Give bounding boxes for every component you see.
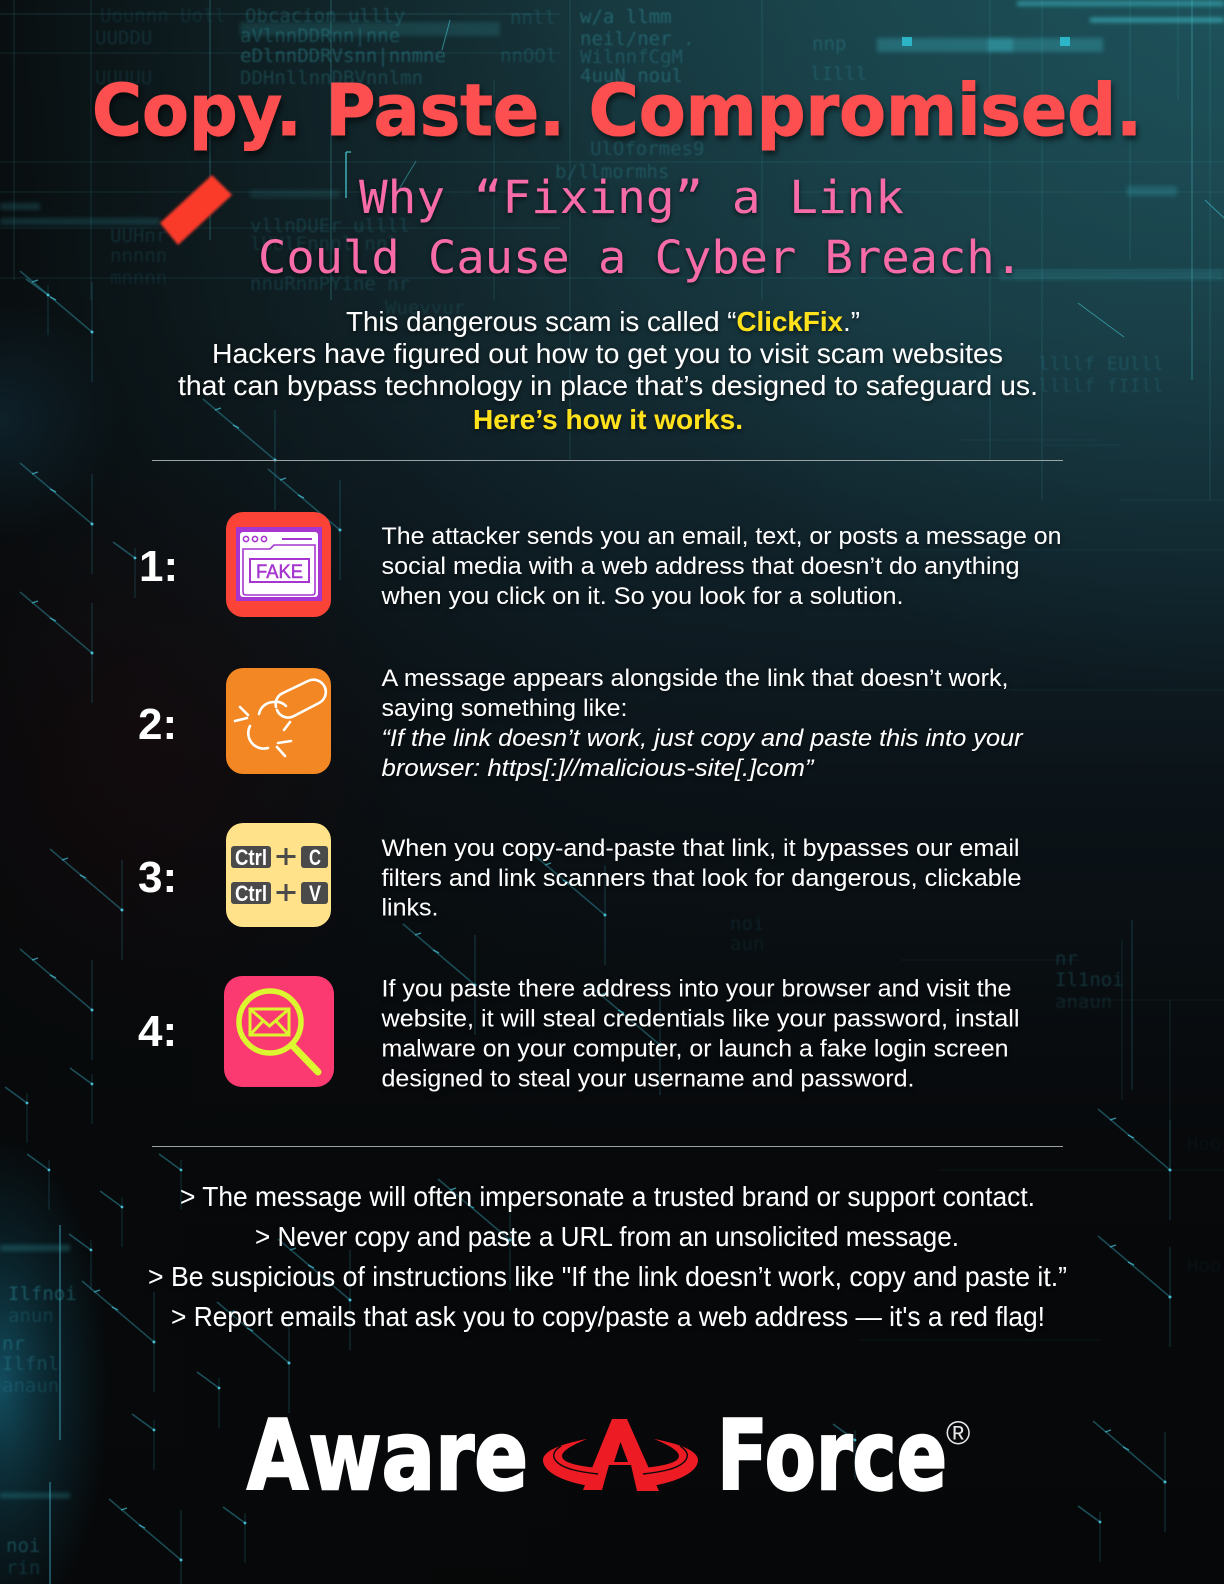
icon: keyboard shortcuts (226, 823, 331, 927)
faint code: aVlnnDDRnn|nne (240, 25, 400, 47)
faint code: vllnDUEr ullll (250, 215, 410, 237)
step 4 text (380, 976, 1020, 1092)
icon: keyboard shortcuts: Ctrl (235, 881, 267, 906)
diagonal dashes (5, 271, 1172, 1584)
logo mark (543, 1419, 698, 1491)
faint code: Obcacion ullly (245, 5, 405, 27)
step 4 text: website, it will steal credentials like your password, install (380, 1006, 1020, 1032)
step 2 number: 2: (138, 700, 177, 749)
step 3 text: links. (382, 894, 438, 922)
faint code: lUUlEnnnl nnl (250, 233, 399, 255)
faint code: nnnnn (110, 245, 167, 267)
faint code: llllf fIIll (1038, 375, 1164, 397)
icon: magnifier over envelope (224, 976, 334, 1087)
step 4 text: designed to steal your username and password. (382, 1066, 914, 1092)
intro text (178, 306, 1038, 435)
faint code: WilnnfCgM (580, 46, 683, 68)
step 4 number: 4: (138, 1007, 177, 1056)
faint code: b/llmormhs (555, 161, 669, 183)
faint code: nnll (510, 7, 556, 29)
step 3 (138, 823, 1022, 927)
intro text: that can bypass technology in place that’s designed to safeguard us. (178, 370, 1038, 401)
icon: keyboard shortcuts: C (309, 845, 321, 870)
step 2 text: browser: https[:]//malicious-site[.]com” (382, 755, 815, 782)
subtitle: Why “Fixing” a Link (359, 171, 904, 224)
intro text: Here’s how it works. (473, 404, 743, 435)
faint code: nnuRnnPYine nr (250, 273, 410, 295)
step 4 (138, 976, 1020, 1092)
faint code: neil/ner . (580, 28, 694, 50)
faint code: Hoo (1187, 1255, 1221, 1277)
icon: broken chain link (226, 668, 331, 774)
faint code: 4uuN noul (580, 65, 683, 87)
faint code: UUUUU (95, 67, 152, 89)
icon: fake browser window: FAKE (256, 562, 303, 583)
step 2 text: A message appears alongside the link that doesn’t work, (382, 665, 1009, 692)
step 3 text (382, 835, 1022, 922)
faint code: noi (6, 1535, 40, 1557)
step 3 text: When you copy-and-paste that link, it bypasses our email (382, 835, 1020, 862)
faint code: Ilfnl (2, 1353, 59, 1375)
title: Copy. Paste. Compromised. (92, 69, 1142, 152)
step 2 text: saying something like: (382, 695, 628, 722)
faint code: Hoo (1187, 1133, 1221, 1155)
faint code: llllf EUlll (1038, 353, 1164, 375)
faint code: nnp (812, 33, 846, 55)
icon: keyboard shortcuts: Ctrl (235, 845, 267, 870)
step 4 text: malware on your computer, or launch a fake login screen (382, 1036, 1008, 1062)
faint code: anun (8, 1305, 54, 1327)
tips list: > Be suspicious of instructions like "If the link doesn’t work, copy and paste it.” (148, 1261, 1067, 1292)
step 1 text: when you click on it. So you look for a solution. (380, 583, 903, 610)
subtitle: Could Cause a Cyber Breach. (258, 231, 1023, 284)
step 1 text (380, 523, 1061, 610)
icon: keyboard shortcuts: V (309, 881, 321, 906)
faint code: eDlnnDDRVsnn|nnmne (240, 45, 446, 67)
logo: AwareForce: Force (717, 1400, 947, 1512)
faint code: anaun (2, 1375, 59, 1397)
faint code: mnnnn (110, 267, 167, 289)
subtitle (258, 171, 1023, 284)
faint code: nr (1055, 948, 1078, 970)
intro text: Hackers have figured out how to get you to visit scam websites (212, 338, 1003, 369)
intro text: This dangerous scam is called “ClickFix.” (346, 306, 860, 337)
faint code: lIlll (810, 63, 867, 85)
faint code: anaun (1055, 991, 1112, 1013)
logo: AwareForce: ® (946, 1414, 970, 1451)
decorative red tilted bar (160, 175, 232, 245)
faint code: Il1noi (1055, 969, 1124, 991)
logo: AwareForce (247, 1400, 970, 1512)
faint code: Ilfnoi (8, 1283, 77, 1305)
faint code: rin (6, 1557, 40, 1579)
faint code: DDHnllnnDBVnnlmn (240, 67, 423, 89)
tips list: > Never copy and paste a URL from an unsolicited message. (255, 1221, 959, 1252)
faint code: nnOOl (500, 45, 557, 67)
faint code: nr (2, 1333, 25, 1355)
faint code: Uounnn Uoll (100, 5, 226, 27)
step 1 number: 1: (139, 542, 178, 591)
step 1 (139, 512, 1062, 617)
step 2 text: “If the link doesn’t work, just copy and paste this into your (382, 725, 1023, 752)
tips list (148, 1181, 1067, 1332)
step 4 text: If you paste there address into your browser and visit the (382, 976, 1012, 1002)
step 3 text: filters and link scanners that look for dangerous, clickable (382, 865, 1022, 892)
faint code: w/a llmm (580, 6, 672, 28)
tips list: > The message will often impersonate a trusted brand or support contact. (180, 1181, 1035, 1212)
step 2 text (382, 665, 1023, 782)
faint code: Wuevvur (385, 297, 465, 319)
faint code: UUDDU (95, 27, 152, 49)
faint code: UUHnr (110, 225, 167, 247)
tips list: > Report emails that ask you to copy/paste a web address — it's a red flag! (171, 1301, 1045, 1332)
logo: AwareForce: Aware (247, 1400, 528, 1512)
step 3 number: 3: (138, 853, 177, 902)
step 2 (138, 665, 1023, 782)
faint code: UlOformes9 (590, 138, 704, 160)
faint code: noi (730, 913, 764, 935)
step 1 text: The attacker sends you an email, text, or posts a message on (382, 523, 1062, 550)
icon: fake browser window (226, 512, 331, 617)
step 1 text: social media with a web address that doesn’t do anything (382, 553, 1020, 580)
faint code: aun (730, 933, 764, 955)
